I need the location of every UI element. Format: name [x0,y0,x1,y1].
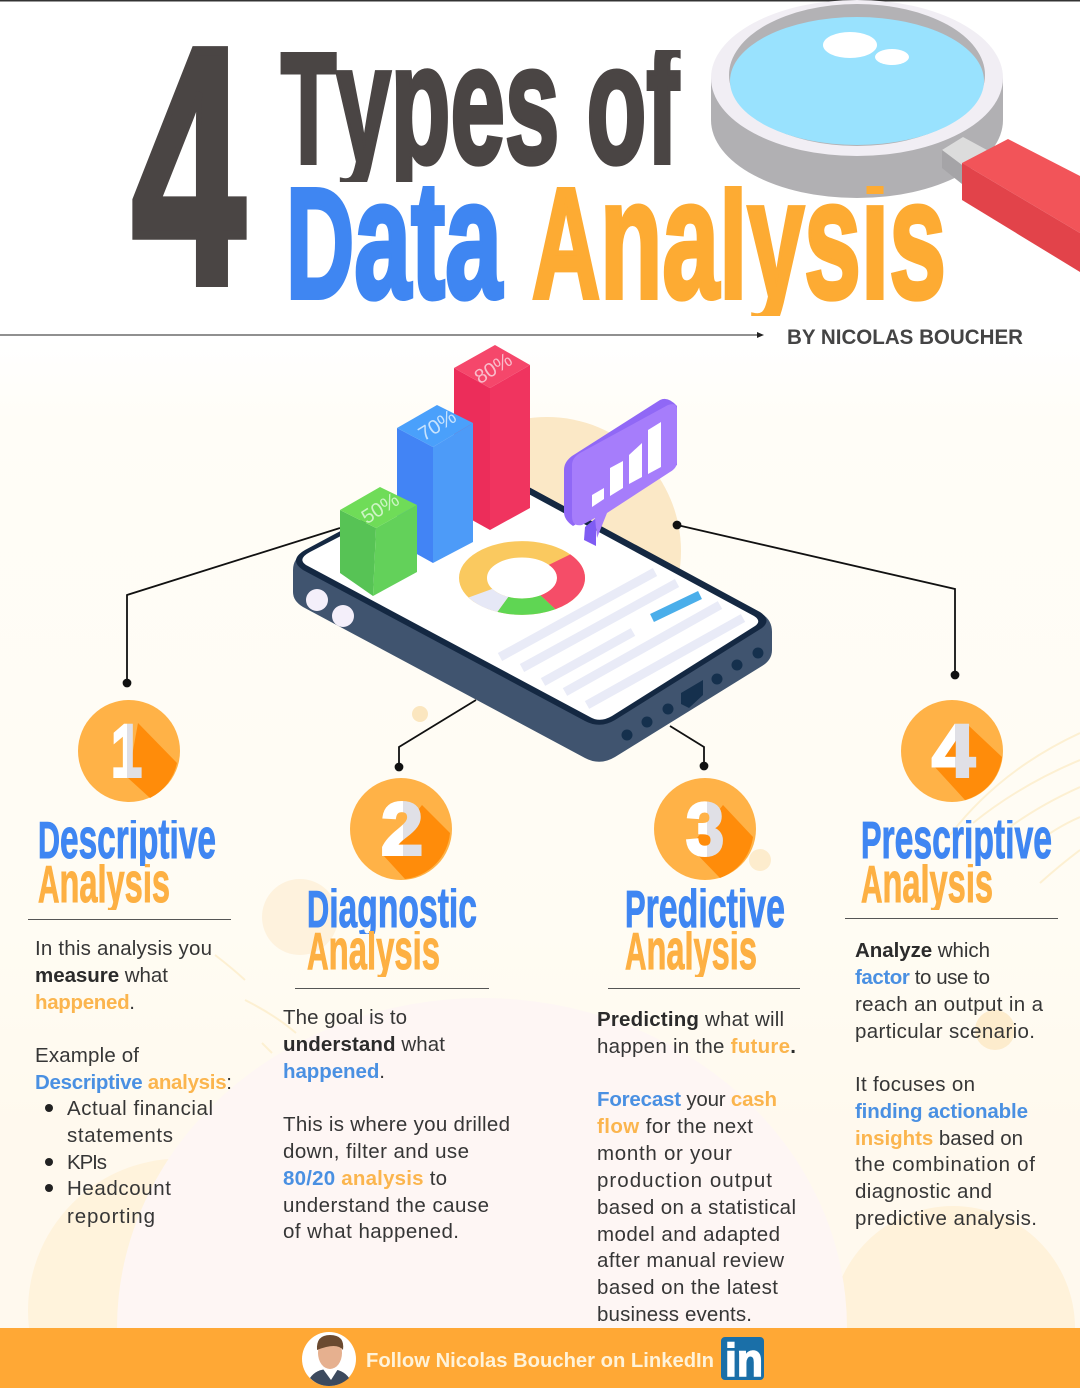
number badge 2 [350,778,452,880]
body text [855,939,1044,1230]
panel: diagnostic analysis [283,778,510,1243]
number badge 4 [901,700,1003,802]
icon: magnifying glass [711,0,1080,272]
panel: predictive analysis [597,778,800,1326]
body text: This is where you drilled [283,1113,510,1136]
bar: blue 70% [397,405,473,563]
body text: The goal is to [283,1006,407,1029]
body text: model and adapted [597,1223,780,1246]
bar: green 50%: 50% [358,489,404,529]
speech bubble chart [564,399,677,546]
body text: happened. [35,991,135,1014]
body text: Descriptive analysis: [35,1071,232,1094]
body text: factor to use to [855,966,990,989]
ports [622,648,764,740]
donut chart [473,549,571,607]
body text: the combination of [855,1153,1035,1176]
panel: prescriptive analysis [845,700,1058,1230]
body text: Example of [35,1044,139,1067]
icon: LinkedIn: in [725,1334,763,1386]
heading [38,820,216,910]
body text: It focuses on [855,1073,975,1096]
body text: finding actionable [855,1100,1028,1123]
body text: of what happened. [283,1220,459,1243]
body text: diagnostic and [855,1180,992,1203]
body text: understand what [283,1033,445,1056]
body text: based on a statistical [597,1196,796,1219]
body text: particular scenario. [855,1020,1035,1043]
heading: Diagnostic [307,876,477,940]
connector: descriptive [124,528,340,686]
body text: happened. [283,1060,385,1083]
heading [307,888,476,977]
body text: predictive analysis. [855,1207,1037,1230]
body text: reach an output in a [855,993,1044,1016]
heading [861,820,1052,910]
title: Types of [281,10,679,200]
body text [35,937,232,1228]
body text: Forecast your cash [597,1088,777,1111]
heading [625,888,784,977]
body text: production output [597,1169,772,1192]
body text: Actual financial [67,1097,213,1120]
heading: Predictive [625,876,785,940]
heading: Analysis [861,851,993,915]
body text: after manual review [597,1249,784,1272]
body text [283,1006,510,1243]
number badge 2: 2 [381,788,423,870]
body text: reporting [67,1205,155,1228]
phone screen [302,469,758,720]
bar: green 50% [340,487,417,596]
body text: down, filter and use [283,1140,469,1163]
body text [597,1008,796,1326]
bar: blue 70%: 70% [415,406,461,446]
bar: red 80%: 80% [471,349,517,389]
avatar [302,1332,356,1386]
connector: diagnostic [396,700,476,770]
bar: red 80% [454,345,530,530]
number badge 1 [78,700,180,802]
byline: BY NICOLAS BOUCHER [787,326,1023,349]
number badge 1: 1 [111,710,142,792]
body text: Predicting what will [597,1008,784,1031]
phone body [293,462,772,762]
number badge 3: 3 [686,788,724,870]
heading: Analysis [625,918,757,982]
decorative circle behind phone [413,417,681,685]
connector: predictive [670,726,708,770]
title [132,46,944,316]
body text: based on the latest [597,1276,778,1299]
text strips on screen [500,572,743,705]
body text: measure what [35,964,168,987]
heading: Analysis [38,851,170,915]
body text: Analyze which [855,939,990,962]
footer banner [0,1328,1080,1388]
body text: month or your [597,1142,732,1165]
number badge 4: 4 [932,710,975,792]
body text: statements [67,1124,173,1147]
body text: happen in the future. [597,1035,796,1058]
heading: Analysis [307,918,440,982]
body text: understand the cause [283,1194,489,1217]
body text: KPIs [67,1151,107,1174]
body text: In this analysis you [35,937,212,960]
body text: 80/20 analysis to [283,1167,447,1190]
body text: Headcount [67,1177,171,1200]
call to action: Follow Nicolas Boucher on LinkedIn [366,1350,714,1372]
illustration: phone with charts [293,345,772,762]
number badge 3 [654,778,756,880]
heading: Descriptive [38,807,216,871]
body text: insights based on [855,1127,1023,1150]
buttons [306,589,354,627]
body text: business events. [597,1303,752,1326]
panel: descriptive analysis [28,700,232,1228]
title: Data [286,144,503,334]
body text: flow for the next [597,1115,753,1138]
connector: prescriptive [674,522,958,678]
arrow: header rule [0,332,764,338]
